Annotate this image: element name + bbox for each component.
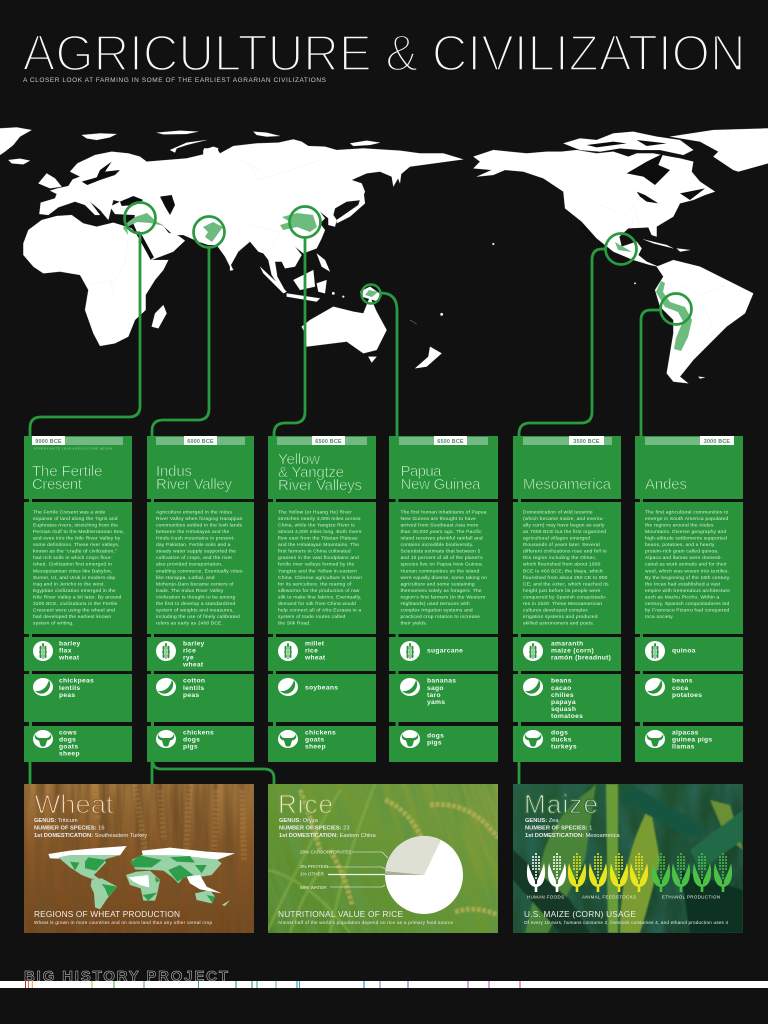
description: such as Machu Picchu. Within a	[645, 594, 720, 600]
crops: grains: maize (corn)	[551, 648, 594, 654]
description: China. Chinese agriculture is known	[278, 575, 362, 581]
corn usage pictogram: HUMAN FOODS	[527, 894, 564, 900]
description: also provided transportation,	[156, 562, 223, 568]
heading: Wheat	[34, 789, 114, 819]
panel: Papua New Guinea	[389, 436, 498, 762]
note: Wheat is grown in more countries and on more land than any other cereal crop	[34, 920, 212, 925]
animals	[389, 722, 498, 762]
description: expanse of land along the Tigris and	[33, 516, 118, 522]
crops: grains: flax	[59, 648, 72, 654]
note: Of every 10 ears, humans consume 2, livestock consumes 4, and ethanol production uses 4	[524, 920, 728, 925]
description: Domestication of wild teosinte	[523, 509, 593, 515]
wheat production map	[48, 846, 235, 909]
pie chart: nutritional value: 1% OTHER	[300, 872, 325, 876]
crops: legumes: cacao	[551, 685, 571, 692]
description: height just before its people were	[523, 588, 601, 594]
corn usage pictogram: ANIMAL FEEDSTOCKS	[582, 894, 636, 900]
heading: Cresent	[32, 476, 83, 493]
description: Egyptian civilization emerged in the	[33, 588, 116, 594]
description: century, Spanish conquistadores led	[645, 601, 730, 607]
crops: legumes: taro	[427, 692, 441, 699]
crops: grains: rye	[183, 654, 194, 662]
description: island receives plentiful rainfall and	[400, 536, 483, 542]
world map	[0, 127, 768, 383]
description: 3200 BCE, civilizations in the Fertile	[33, 601, 118, 607]
crops: legumes: coca	[672, 685, 688, 692]
description	[389, 499, 498, 634]
description: first farmers in China cultivated	[278, 549, 351, 555]
heading: The Fertile	[32, 463, 102, 480]
footer: Big History Project logo: BIG HISTORY PROJECT	[24, 968, 228, 985]
description: high-altitude settlements supported	[645, 536, 727, 542]
description: arrived from Southeast Asia more	[400, 522, 479, 528]
description	[635, 499, 743, 634]
pie chart: nutritional value: 28% CARBOHYDRATES	[300, 850, 351, 854]
description: region's first farmers (in the Western	[400, 594, 486, 600]
facts: Southeastern Turkey	[93, 833, 147, 839]
description: emerge in South America populated	[645, 516, 728, 522]
facts: 1	[588, 826, 592, 832]
crops: legumes	[635, 671, 743, 722]
animals	[268, 722, 376, 762]
crops: legumes: sago	[427, 685, 444, 692]
description: agriculture and some sustaining	[400, 581, 475, 587]
description: their yields.	[400, 621, 427, 627]
animals: goats	[59, 744, 78, 750]
maize photo	[513, 784, 743, 933]
animals: alpacas	[672, 730, 699, 736]
description: enabling commerce. Eventually cities	[156, 568, 243, 574]
description: system of writing.	[33, 621, 74, 627]
description: skilled astronomers and poets.	[523, 621, 594, 627]
description: system of trade routes called	[278, 614, 346, 620]
caption: NUTRITIONAL VALUE OF RICE	[278, 909, 403, 919]
description: thousands of years later. Several	[523, 542, 600, 548]
description: cultures developed complex	[523, 608, 588, 614]
description: between the Himalayas and the	[156, 529, 230, 535]
description: Yangtze and the Yellow in eastern	[278, 568, 357, 574]
description: ished. Civilization first emerged in	[33, 562, 112, 568]
description: Persian Gulf to the Mediterranean Sea,	[33, 529, 124, 535]
facts: NUMBER OF SPECIES:	[525, 826, 588, 832]
crops: grains	[513, 634, 621, 671]
description: res in 1520. These Mesoamerican	[523, 601, 602, 607]
facts: 1st DOMESTICATION:	[279, 833, 338, 839]
description: contains incredible biodiversity.	[400, 542, 473, 548]
animals: pigs	[427, 740, 442, 746]
description: which flourished from about 1600	[523, 562, 601, 568]
caption: U.S. MAIZE (CORN) USAGE	[524, 909, 636, 919]
description: The Yellow (or Huang He) River	[278, 509, 352, 515]
description: Sumer, Ur, and Uruk in modern-day	[33, 575, 116, 581]
description: empire with tremendous architecture	[645, 588, 730, 594]
description: for its sericulture, the rearing of	[278, 581, 352, 587]
heading	[278, 451, 362, 494]
crops: legumes	[147, 671, 254, 722]
heading	[400, 463, 481, 493]
description: Mohenjo-Daro became centers of	[156, 581, 234, 587]
description: Agriculture emerged in the Indus	[156, 509, 233, 515]
description: almost 4,000 miles long. Both rivers	[278, 529, 362, 535]
facts: 16	[97, 826, 104, 832]
crops: legumes	[268, 671, 376, 722]
facts: Triticum	[56, 818, 78, 824]
facts: 23	[342, 826, 350, 832]
description: Iraq and in Jericho to the west.	[33, 581, 105, 587]
footer: timeline bar	[0, 981, 768, 988]
corn usage pictogram	[527, 853, 732, 900]
description: By the beginning of the 16th century,	[645, 575, 731, 581]
corn usage pictogram: ETHANOL PRODUCTION	[662, 894, 720, 900]
description: and even into the Nile River Valley by	[33, 536, 121, 542]
crops: legumes: peas	[59, 692, 75, 699]
description: by Francisco Pizarro had conquered	[645, 608, 729, 614]
animals: dogs	[427, 732, 444, 740]
description: Hindu Kush mountains in present-	[156, 536, 235, 542]
pie chart: nutritional value: 68% WATER	[300, 885, 327, 890]
description: demand for silk from China would	[278, 601, 356, 607]
crops: grains	[147, 634, 254, 671]
description: Scientists estimate that between 5	[400, 549, 481, 555]
description: Nile River Valley a bit later. By around	[33, 594, 122, 600]
description: silkworms for the production of raw	[278, 588, 360, 594]
description: River Valley when foraging Harappan	[156, 516, 243, 522]
crops: legumes: yams	[427, 699, 445, 706]
crops: legumes: chilies	[551, 692, 574, 699]
description: The first agricultural communities to	[645, 509, 729, 515]
date bar: 3000 BCE: 3000 BCE	[704, 439, 730, 445]
crops: grains: wheat	[58, 654, 80, 662]
animals: sheep	[59, 750, 80, 758]
facts: Oryza	[301, 818, 319, 824]
facts: Eastern China	[338, 833, 376, 839]
description: steady water supply supported the	[156, 549, 236, 555]
pie chart: nutritional value: 3% PROTEIN	[300, 864, 328, 869]
crops: grains: barley	[59, 640, 81, 648]
panel: Mesoamerica	[513, 436, 621, 762]
facts: Zea	[547, 818, 559, 824]
crops: grains	[24, 634, 132, 671]
crops: legumes: potatoes	[672, 692, 702, 699]
description: trade. The Indus River Valley	[156, 588, 224, 594]
title: AGRICULTURE & CIVILIZATION	[22, 24, 746, 82]
animals: sheep	[305, 744, 326, 750]
description: Highlands) used terraces with	[400, 601, 470, 607]
crops: legumes: lentils	[59, 685, 80, 692]
date bar: 6000 BCE: 6000 BCE	[187, 439, 214, 445]
animals: dogs	[551, 730, 568, 736]
description: Mountains. Diverse geography and	[645, 529, 726, 535]
crops: legumes: beans	[551, 678, 572, 684]
crops: legumes: soybeans	[305, 684, 338, 692]
description: flourished from about 250 CE to 900	[523, 575, 608, 581]
description: (which became maize, and eventu-	[523, 516, 604, 522]
rice photo	[268, 784, 498, 933]
description: The Fertile Cresent was a wide	[33, 509, 106, 515]
panel: Yellow and Yangtze River Valleys	[268, 436, 376, 762]
description: Alpaca and llamas were domesti-	[645, 555, 723, 561]
panel: wheat	[24, 784, 254, 933]
wheat photo	[24, 784, 254, 933]
facts: NUMBER OF SPECIES:	[34, 826, 97, 832]
description: had developed the earliest known	[33, 614, 111, 620]
description: protein-rich grain called quinoa.	[645, 549, 719, 555]
description: agricultural villages emerged	[523, 536, 590, 542]
description: were equally diverse, some taking on	[400, 575, 487, 581]
description: rulers as early as 2400 BCE.	[156, 621, 223, 627]
crops: legumes: beans	[672, 678, 693, 684]
description: Inca society.	[645, 614, 674, 620]
description: species live on Papua New Guinea.	[400, 562, 483, 568]
heading	[32, 463, 102, 493]
description: some definitions. These river valleys,	[33, 542, 120, 548]
date bar: 3500 BCE	[513, 436, 621, 499]
crops: grains: amaranth	[551, 640, 584, 648]
description: themselves solely as foragers. The	[400, 588, 482, 594]
crops: legumes: cotton	[183, 678, 205, 684]
date bar: 6500 BCE: 6500 BCE	[315, 439, 342, 445]
description: and 10 percent of all of the planet's	[400, 555, 483, 561]
crops: grains	[389, 634, 498, 671]
heading: Rice	[278, 789, 333, 819]
description: the Incas had established a vast	[645, 581, 721, 587]
heading: Maize	[524, 789, 598, 819]
note: Almost half of the world's population depend on rice as a primary food source	[278, 920, 453, 925]
description: CE; and the Aztec, which reached its	[523, 581, 609, 587]
description: day Pakistan. Fertile soils and a	[156, 542, 231, 548]
heading: Indus	[156, 463, 192, 480]
crops: grains: sugarcane	[427, 648, 463, 654]
crops: grains: rice	[305, 648, 318, 654]
crops: grains	[268, 634, 376, 671]
caption: REGIONS OF WHEAT PRODUCTION	[34, 909, 180, 919]
crops: legumes: chickpeas	[59, 678, 94, 684]
heading: River Valley	[156, 476, 232, 493]
crops: legumes	[513, 671, 621, 722]
date bar: 9000 BCE	[24, 436, 132, 499]
heading: New Guinea	[400, 476, 481, 493]
description: fertile river valleys formed by the	[278, 562, 354, 568]
crops: legumes: peas	[183, 692, 199, 699]
animals	[513, 722, 621, 762]
crops: grains: millet	[305, 640, 325, 648]
animals: guinea pigs	[672, 736, 712, 744]
date bar: 3500 BCE: 3500 BCE	[573, 439, 600, 445]
pie chart: nutritional value	[300, 836, 463, 914]
crops: legumes	[24, 671, 132, 722]
date bar: 9000 BCE: APPROXIMATE YEAR AGRICULTURE BEGAN	[34, 446, 112, 450]
description: and the Himalayan Mountains. The	[278, 542, 359, 548]
animals: dogs	[183, 736, 200, 744]
description: complex irrigation systems and	[400, 608, 473, 614]
date bar: 6500 BCE	[389, 436, 498, 499]
description: beans, potatoes, and a hearty	[645, 542, 715, 548]
description: system of weights and measures,	[156, 608, 234, 614]
crops: legumes: tomatoes	[551, 713, 583, 720]
description: BCE to 400 BCE; the Maya, which	[523, 568, 603, 574]
crops: grains: rice	[183, 648, 196, 654]
animals: ducks	[551, 736, 572, 744]
crops: grains: wheat	[304, 654, 326, 662]
description: communities settled in the lush lands	[156, 522, 243, 528]
description: different civilizations rose and fell in	[523, 549, 607, 555]
description: New Guinea are thought to have	[400, 516, 476, 522]
crops: grains: barley	[183, 640, 205, 648]
crops: grains: ramón (breadnut)	[551, 654, 611, 662]
heading: Papua	[400, 463, 442, 480]
description: conquered by Spanish conquistado-	[523, 594, 607, 600]
description: as 7000 BCE but the first organized	[523, 529, 606, 535]
panel: maize	[513, 784, 743, 933]
heading: Andes	[645, 476, 687, 493]
panel: rice	[268, 784, 498, 933]
description: including the use of finely calibrated	[156, 614, 240, 620]
facts: GENUS:	[525, 818, 547, 824]
crops: grains	[635, 634, 743, 671]
crops: legumes: lentils	[183, 685, 204, 692]
description	[513, 499, 621, 634]
description: China, while the Yangtze River is	[278, 522, 355, 528]
facts: GENUS:	[279, 818, 301, 824]
description: had rich soils in which crops flour-	[33, 555, 113, 561]
description	[24, 499, 132, 634]
heading: River Valleys	[278, 477, 362, 494]
description: Euphrates rivers, stretching from the	[33, 522, 118, 528]
animals	[24, 722, 132, 762]
description: this region including the Olmec,	[523, 555, 597, 561]
description	[147, 499, 254, 634]
panel: Indus River Valley	[147, 436, 254, 762]
description: the Silk Road.	[278, 621, 311, 627]
animals: chickens	[305, 730, 336, 736]
description: stretches nearly 3,000 miles across	[278, 516, 361, 522]
heading: Mesoamerica	[523, 476, 612, 493]
heading	[156, 463, 232, 493]
description: ally corn) may have begun as early	[523, 522, 605, 528]
date bar: 9000 BCE: 9000 BCE	[35, 439, 62, 445]
description: irrigation systems and produced	[523, 614, 598, 620]
description: known as the "cradle of civilization,"	[33, 549, 117, 555]
description: grasses in the vast floodplains and	[278, 555, 359, 561]
animals: llamas	[672, 744, 695, 750]
description	[268, 499, 376, 634]
animals: turkeys	[551, 744, 577, 750]
description: flow east from the Tibetan Plateau	[278, 536, 358, 542]
description: Mesopotamian cities like Babylon,	[33, 568, 112, 574]
description: The first human inhabitants of Papua	[400, 509, 487, 515]
animals: pigs	[183, 744, 198, 750]
animals	[147, 722, 254, 762]
description: cated as work animals and for their	[645, 562, 727, 568]
description: wool, which was woven into textiles.	[645, 568, 729, 574]
crops: legumes	[389, 671, 498, 722]
subtitle: A CLOSER LOOK AT FARMING IN SOME OF THE EARLIEST AGRARIAN CIVILIZATIONS	[23, 77, 327, 84]
facts: GENUS:	[34, 818, 56, 824]
animals: cows	[59, 730, 77, 736]
heading: Yellow	[278, 451, 320, 468]
description: like Harappa, Lothal, and	[156, 575, 215, 581]
animals: chickens	[183, 730, 214, 736]
crops: grains: wheat	[182, 662, 204, 668]
description: practiced crop rotation to increase	[400, 614, 480, 620]
description: civilization is thought to be among	[156, 594, 235, 600]
description: silk to make fine fabrics. Eventually,	[278, 594, 362, 600]
description: than 40,000 years ago. The Pacific	[400, 529, 482, 535]
heading: & Yangtze	[278, 464, 344, 481]
animals: goats	[305, 736, 324, 744]
description: cultivation of crops, and the river	[156, 555, 233, 561]
date bar: 3000 BCE	[635, 436, 743, 499]
facts: 1st DOMESTICATION:	[34, 833, 93, 839]
crops: legumes: bananas	[427, 678, 456, 684]
description: help connect all of Afro-Eurasia in a	[278, 608, 361, 614]
date bar: 6500 BCE	[268, 436, 376, 499]
facts: NUMBER OF SPECIES:	[279, 826, 342, 832]
crops: grains: quinoa	[672, 648, 696, 654]
animals: dogs	[59, 736, 76, 744]
facts: 1st DOMESTICATION:	[525, 833, 584, 839]
date bar: 6500 BCE: 6500 BCE	[437, 439, 464, 445]
crops: legumes: squash	[551, 706, 576, 713]
panel: Andes	[635, 436, 743, 762]
crops: legumes: papaya	[551, 699, 576, 706]
description: the first to develop a standardized	[156, 601, 235, 607]
facts: Mesoamerica	[584, 833, 621, 839]
animals	[635, 722, 743, 762]
description: Human communities on the island	[400, 568, 480, 574]
map highlight regions	[123, 213, 692, 351]
date bar: 6000 BCE	[147, 436, 254, 499]
panel: Fertile Crescent	[24, 436, 132, 762]
description: the regions around the Andes	[645, 522, 714, 528]
description: Crescent were using the wheel and	[33, 608, 115, 614]
connector lines and location circles	[30, 202, 692, 784]
